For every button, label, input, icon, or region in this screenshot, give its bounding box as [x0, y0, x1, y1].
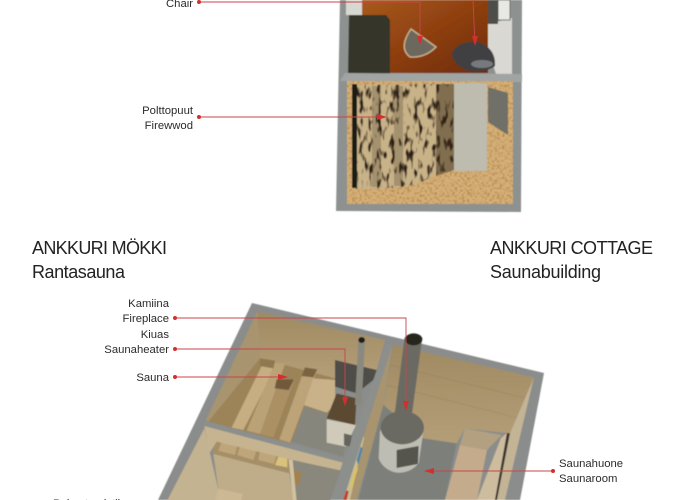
heading: Finnish [32, 238, 167, 282]
glowing lamp [275, 457, 287, 467]
dark wall plate [335, 360, 377, 393]
right wall niche [488, 87, 508, 135]
leader: chair [199, 2, 420, 44]
cabinet [348, 15, 390, 75]
back wall [450, 83, 487, 171]
left wall [167, 428, 218, 500]
illustration: firewood storage building plan [336, 0, 522, 212]
leader: fireplace [175, 318, 406, 410]
leader: sauna room [425, 470, 553, 472]
heading: English [490, 238, 653, 282]
label: sauna heater: Saunaheater [104, 344, 169, 356]
heading: Finnish: Rantasauna [32, 262, 126, 282]
light floor panel [304, 378, 335, 413]
label: fireplace: Fireplace [123, 313, 169, 325]
label: fireplace: Kamiina [128, 298, 170, 310]
outer walls [158, 303, 544, 500]
right white wall [488, 18, 512, 75]
sauna back wall [257, 312, 385, 378]
doorway floor [292, 460, 342, 500]
label: firewood [142, 105, 194, 132]
label: sauna room: Saunaroom [559, 473, 617, 485]
upper left pale wall [346, 0, 362, 15]
label: firewood: Polttopuut [142, 105, 194, 117]
door frame [289, 459, 297, 500]
sauna left wall [206, 312, 260, 422]
horizontal wall face [204, 426, 343, 471]
heading: Finnish: ANKKURI MÖKKI [32, 238, 167, 258]
lower room OSB floor [347, 81, 513, 204]
artwork strip [343, 437, 364, 500]
callout lines and arrows [175, 0, 553, 471]
dressing floor behind [213, 437, 290, 473]
leader: stove top [473, 0, 475, 45]
bench planks [232, 366, 275, 430]
label: sauna room [559, 458, 623, 485]
label: sauna heater: Kiuas [141, 329, 169, 341]
label: firewood: Firewwod [145, 120, 193, 132]
label: sauna heater [104, 329, 169, 356]
back wall [383, 345, 534, 443]
divider shelf [340, 73, 522, 82]
partition top [330, 343, 392, 500]
dark sauna stove [452, 42, 495, 71]
heading: English: ANKKURI COTTAGE [490, 238, 653, 258]
left wall [343, 345, 392, 500]
illustration: sauna building cutaway [158, 303, 544, 500]
plank lines [387, 365, 527, 418]
firewood stack [356, 84, 454, 189]
right wall [497, 377, 534, 500]
label: sauna: Sauna [136, 372, 170, 384]
horizontal wall top [204, 421, 343, 463]
chair [404, 29, 436, 57]
stove body [379, 333, 424, 473]
outer concrete walls [336, 0, 522, 212]
floor [358, 405, 457, 500]
label: sauna room: Saunahuone [559, 458, 623, 470]
window [498, 0, 510, 20]
upper room: wood floor [362, 0, 488, 73]
sauna room [206, 312, 385, 457]
callout dots and arrowheads [173, 0, 555, 474]
leader: firewood [199, 116, 385, 118]
firewood shaded end [436, 84, 454, 176]
heading: English: Saunabuilding [490, 262, 601, 282]
concrete floor [292, 407, 345, 457]
firewood dark bands [372, 86, 403, 187]
leader: sauna [175, 376, 287, 378]
leader: sauna heater [175, 349, 345, 405]
firewood dark left edge [352, 84, 357, 188]
bench base [208, 358, 335, 443]
low bench [215, 489, 243, 500]
dressing room [167, 421, 343, 500]
sofa [445, 428, 510, 500]
inner panel [213, 454, 294, 500]
sauna heater [327, 393, 357, 447]
right room [330, 333, 534, 500]
sauna chimney [355, 337, 365, 405]
label: fireplace [123, 298, 170, 325]
